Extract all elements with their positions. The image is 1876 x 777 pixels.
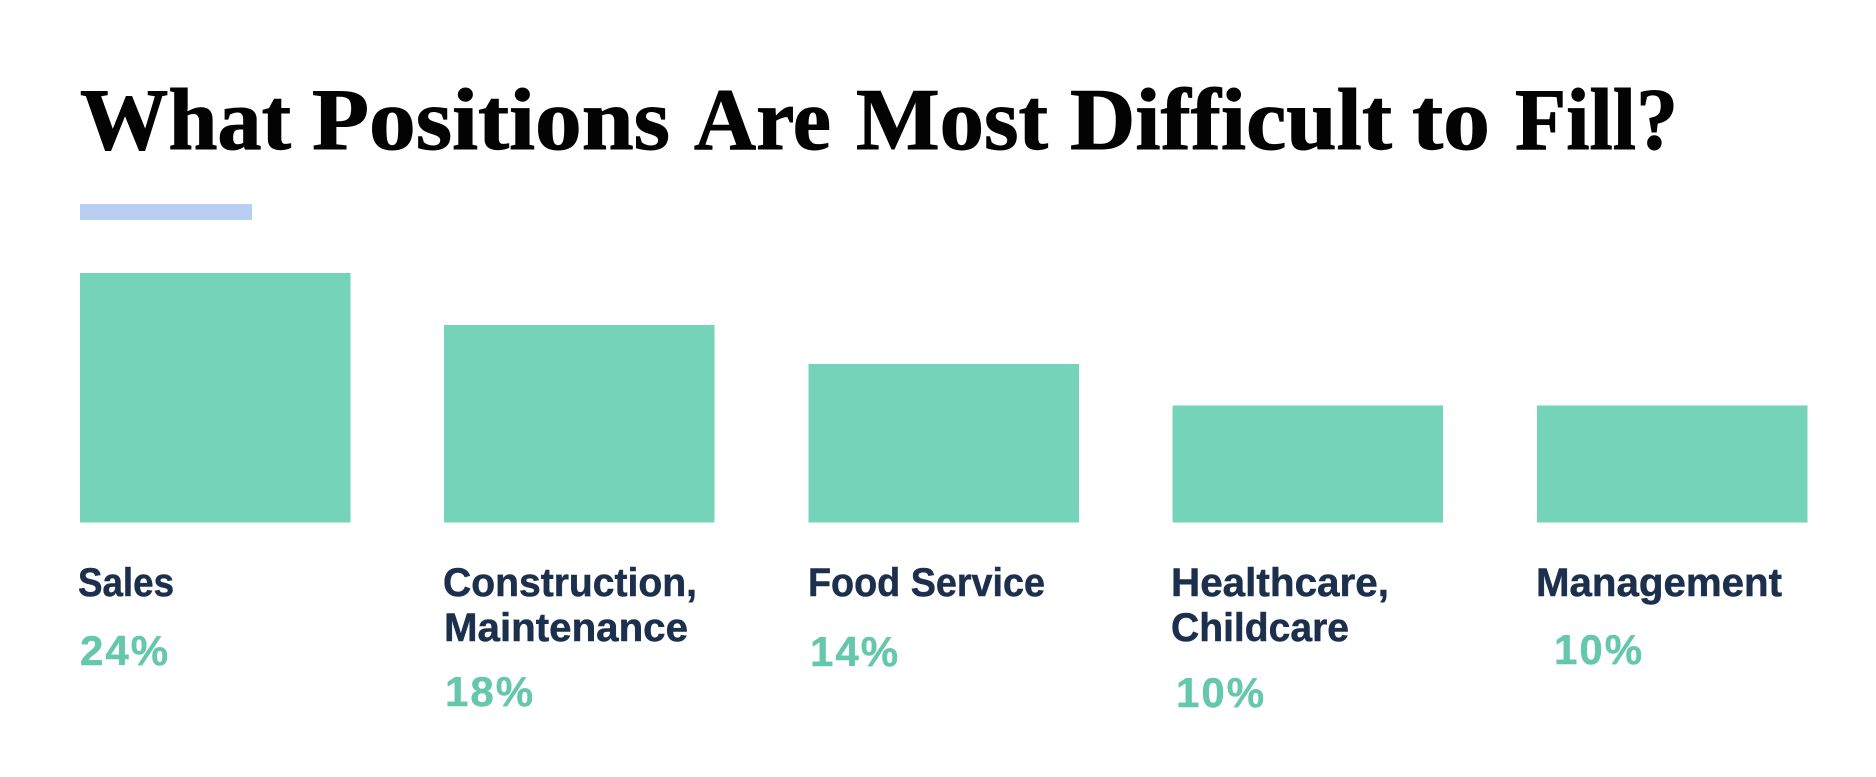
- title: Difficult: [1070, 72, 1392, 169]
- label: Sales: Sales: [78, 561, 174, 605]
- value: Food Service: 14%: [810, 628, 900, 675]
- label: Construction, Maintenance: Construction,: [443, 561, 697, 605]
- label: Food Service: Food Service: [808, 561, 1045, 605]
- value: Construction, Maintenance: 18%: [445, 668, 535, 715]
- bar: Management 10%: [1537, 406, 1808, 522]
- title: What: [80, 72, 291, 169]
- bar: Construction, Maintenance 18%: [444, 325, 714, 522]
- title: Fill?: [1515, 72, 1678, 169]
- label: Healthcare, Childcare: [1171, 561, 1389, 650]
- title accent bar: [80, 204, 252, 220]
- label: Construction, Maintenance: Maintenance: [444, 606, 688, 650]
- title: Are: [694, 72, 831, 169]
- value: Management: 10%: [1554, 626, 1644, 673]
- title: [80, 72, 1678, 169]
- bar chart: [80, 273, 1808, 522]
- label: Healthcare, Childcare: Childcare: [1171, 606, 1349, 650]
- title: Most: [856, 72, 1048, 169]
- bar: Sales 24%: [80, 273, 350, 522]
- bar: Food Service 14%: [808, 364, 1079, 522]
- value: Sales: 24%: [80, 627, 170, 674]
- value: Healthcare, Childcare: 10%: [1176, 669, 1266, 716]
- title: to: [1412, 72, 1490, 169]
- label: Construction, Maintenance: [443, 561, 697, 650]
- title: Positions: [312, 72, 670, 169]
- label: Healthcare, Childcare: Healthcare,: [1171, 561, 1389, 605]
- bar: Healthcare, Childcare 10%: [1172, 406, 1443, 522]
- label: Management: Management: [1536, 561, 1782, 605]
